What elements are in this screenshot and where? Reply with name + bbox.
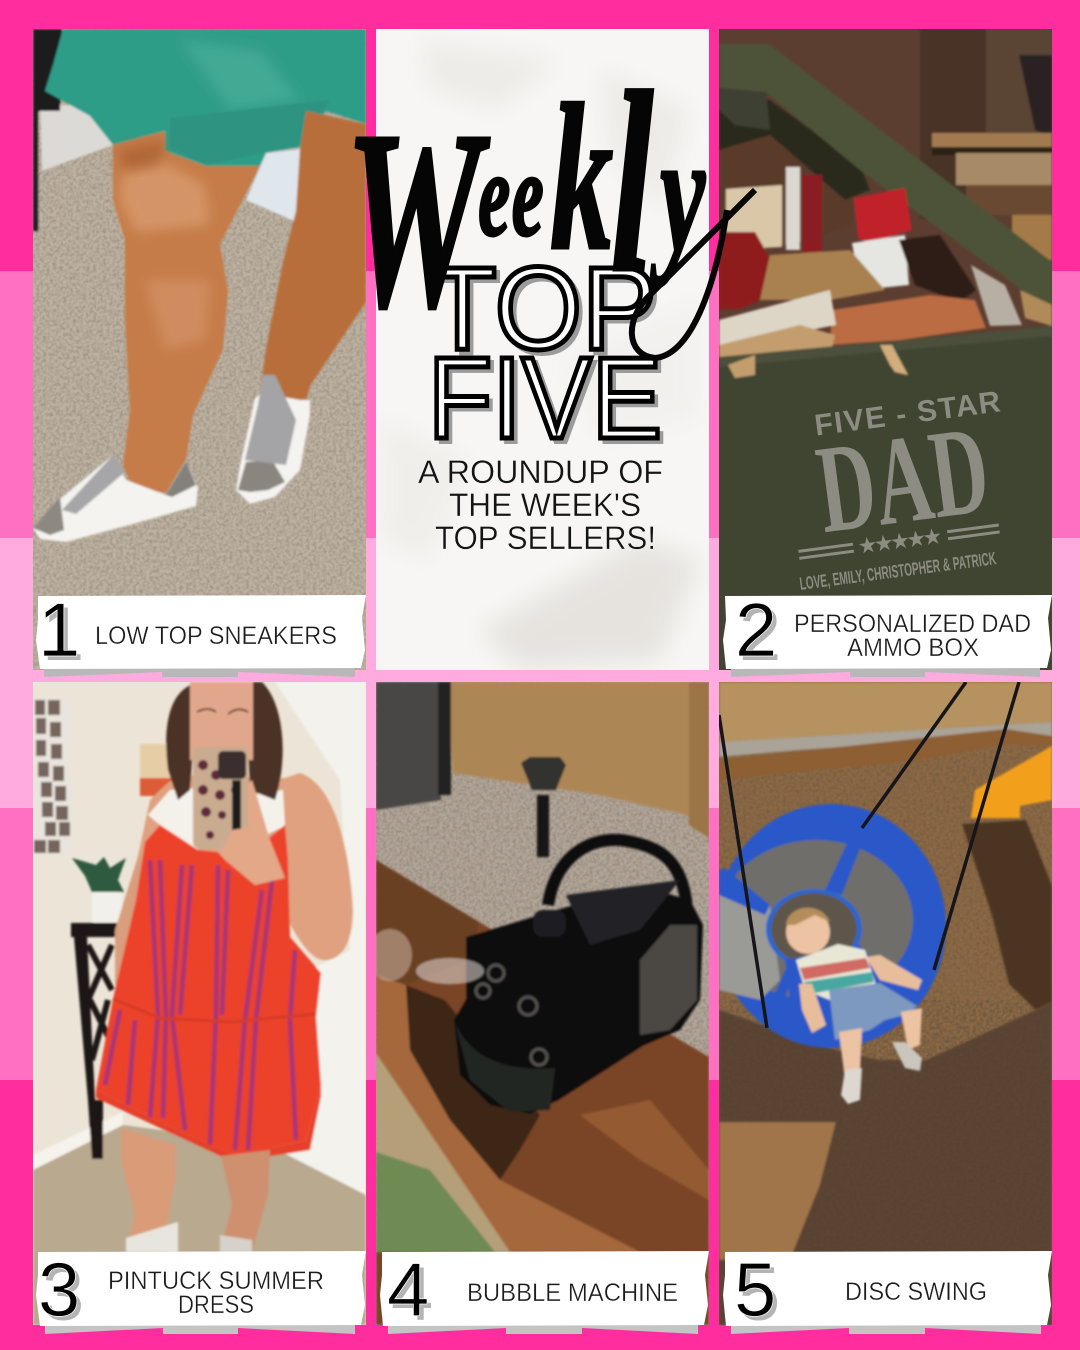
box engraving: ★★★★★ — [856, 523, 944, 559]
label 3: pintuck summer dress: 3 — [38, 1248, 80, 1333]
heading: TOP FIVE — [428, 243, 666, 467]
subtitle — [418, 454, 663, 556]
heading: Weekly script — [345, 40, 755, 361]
label 4: bubble machine: BUBBLE MACHINE — [467, 1279, 678, 1307]
machine — [454, 886, 703, 1114]
label 2: personalized dad ammo box: PERSONALIZED DAD — [794, 610, 1031, 638]
panel: ammo box photo — [719, 29, 1052, 670]
label 3: pintuck summer dress — [36, 1248, 366, 1337]
label 2: personalized dad ammo box — [723, 588, 1052, 677]
panel: sneakers photo — [33, 29, 366, 670]
heading: TOP FIVE: TOP — [432, 247, 661, 379]
timber — [376, 921, 709, 1325]
heading: Weekly script: y — [649, 100, 706, 288]
heading: TOP FIVE: FIVE — [428, 333, 662, 463]
label 3: pintuck summer dress: PINTUCK SUMMER — [108, 1267, 324, 1295]
heading: Weekly script: W — [345, 79, 491, 361]
heading: TOP FIVE: FIVE — [432, 337, 666, 467]
heading: Weekly script: k — [550, 62, 613, 294]
label 3: pintuck summer dress: DRESS — [178, 1291, 254, 1319]
label 4: bubble machine: 4 — [391, 1252, 433, 1337]
swing ropes — [719, 682, 1019, 1028]
label 2: personalized dad ammo box: AMMO BOX — [847, 634, 979, 662]
subtitle: TOP SELLERS! — [435, 520, 656, 556]
label 5: disc swing — [723, 1248, 1052, 1337]
panel: disc swing photo — [716, 682, 1052, 1325]
heading: Weekly script: e — [478, 129, 510, 262]
label 1: low top sneakers: LOW TOP SNEAKERS — [95, 622, 337, 650]
subtitle: A ROUNDUP OF — [418, 454, 663, 490]
heading: Weekly script: e — [512, 129, 544, 262]
label 4: bubble machine: 4 — [387, 1248, 429, 1333]
label 1: low top sneakers: 1 — [42, 592, 84, 677]
subtitle: THE WEEK'S — [449, 487, 641, 523]
heading: Weekly script: l — [610, 40, 654, 327]
panel: title marble — [376, 29, 709, 670]
panel: summer dress photo — [33, 682, 366, 1325]
label 5: disc swing: 5 — [734, 1248, 776, 1333]
label 2: personalized dad ammo box: 2 — [739, 592, 781, 677]
script swash: y tail — [632, 190, 755, 358]
box engraving: FIVE - STAR — [813, 385, 1003, 443]
label 1: low top sneakers: 1 — [38, 588, 80, 673]
marble veins — [380, 40, 700, 670]
box engraving — [798, 392, 1001, 590]
label 3: pintuck summer dress: 3 — [42, 1252, 84, 1337]
label 5: disc swing: DISC SWING — [845, 1278, 987, 1306]
panel: bubble machine photo — [368, 682, 709, 1325]
label 1: low top sneakers — [36, 588, 366, 677]
heading: TOP FIVE: TOP — [428, 243, 657, 375]
label 4: bubble machine — [380, 1248, 709, 1337]
label 5: disc swing: 5 — [738, 1252, 780, 1337]
label 2: personalized dad ammo box: 2 — [735, 588, 777, 673]
